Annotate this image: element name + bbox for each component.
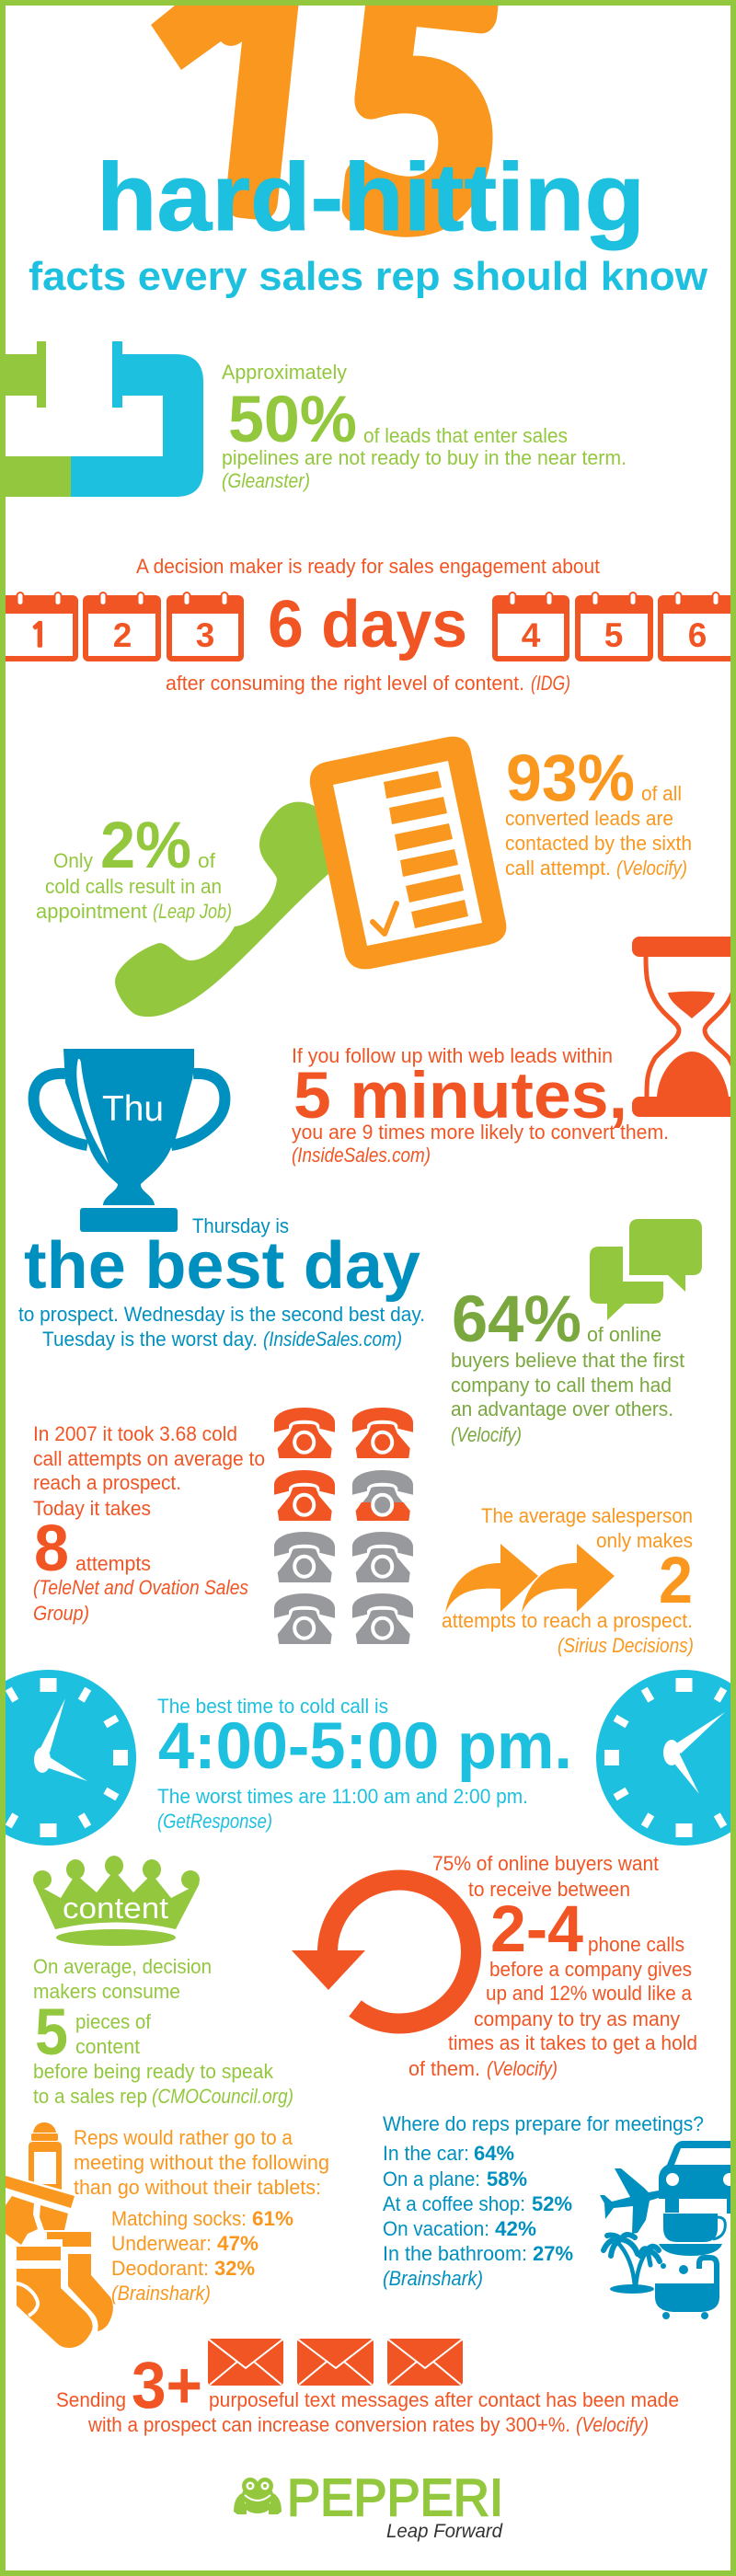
fact: where reps prepare: In the car: (383, 2142, 469, 2165)
calendars: days 1 to 3: 2 (113, 616, 132, 654)
title: facts every sales rep should know (29, 254, 708, 299)
fact: best time to cold call: 4:00-5:00 pm. (158, 1710, 572, 1783)
fact: 5 pieces of content: pieces of (75, 2010, 152, 2033)
fact: 2% of cold calls (36, 810, 232, 923)
trophy label: Thu (102, 1089, 164, 1129)
fact: 2 attempts text: only makes (596, 1529, 693, 1552)
fact: 64% of online buyers: of online (587, 1323, 661, 1346)
fact: where reps prepare: 52% (532, 2192, 572, 2215)
fact: best time to cold call: The worst times are 11:00 am and 2:00 pm. (157, 1785, 528, 1808)
fact: 5 minutes: (InsideSales.com) (292, 1144, 431, 1167)
fact: reps would rather: 61% (252, 2207, 293, 2230)
fact: 8 attempts: (TeleNet and Ovation Sales (33, 1576, 248, 1599)
fact: 2-4 phone calls: (Velocify) (487, 2057, 558, 2080)
fact: reps would rather: than go without their tablets: (74, 2176, 321, 2199)
icon: right clock (596, 1670, 736, 1846)
fact: 8 attempts: 8 (34, 1512, 69, 1585)
fact: 3+ text messages (56, 2350, 679, 2436)
icon: trophy (34, 1049, 224, 1232)
fact: reps would rather: Matching socks: (111, 2207, 247, 2230)
fact: 2 attempts text (442, 1504, 694, 1657)
fact: 93% of converted leads: converted leads are (505, 807, 673, 830)
fact: 64% of online buyers: buyers believe that the first (451, 1349, 685, 1372)
fact: the best day: to prospect. Wednesday is the second best day. (18, 1303, 425, 1326)
fact: 8 attempts: call attempts on average to (33, 1447, 265, 1470)
fact: 2% of cold calls: 2% (100, 810, 191, 882)
fact: the best day: the best day (24, 1229, 420, 1303)
fact: 2-4 phone calls: to receive between (468, 1878, 630, 1901)
calendars: days 1 to 3: 1 (29, 620, 49, 652)
fact: 50% of leads: of leads that enter sales (363, 424, 568, 447)
logo: Pepperi wordmark: Leap Forward (386, 2521, 503, 2542)
fact: the best day (18, 1214, 425, 1351)
fact: 2-4 phone calls (408, 1852, 697, 2080)
fact: 2% of cold calls: of (198, 849, 216, 872)
fact: 2 attempts text: The average salesperson (481, 1504, 693, 1527)
fact: 50% of leads: 50% (228, 384, 357, 456)
logo: Pepperi wordmark: PEPPERI (287, 2468, 503, 2527)
title: hard-hitting (97, 144, 645, 251)
fact: 2-4 phone calls: times as it takes to get a hold (448, 2031, 697, 2054)
fact: 93% of converted leads: call attempt. (505, 857, 611, 880)
fact: 2-4 phone calls: phone calls (588, 1933, 684, 1956)
icon: green telephone handset (115, 802, 328, 1017)
fact: decision maker intro: A decision maker is ready for sales engagement about (136, 555, 601, 578)
fact: 5 pieces of content: before being ready to speak (33, 2060, 274, 2083)
fact: reps would rather: 47% (217, 2232, 259, 2255)
fact: 5 minutes: 5 minutes, (293, 1060, 627, 1133)
fact: where reps prepare: On vacation: (383, 2217, 489, 2240)
fact: 50% of leads (222, 361, 627, 492)
calendars: days 1 to 3 (0, 592, 244, 661)
fact: 2% of cold calls: Only (53, 849, 94, 872)
fact: 50% of leads: (Gleanster) (222, 469, 310, 492)
fact: 3+ text messages: with a prospect can increase conversion rates by 300+%. (87, 2413, 570, 2436)
fact: best time to cold call: The best time to cold call is (157, 1695, 388, 1718)
fact: 3+ text messages: (Velocify) (576, 2413, 649, 2436)
calendars: days 4 to 6: 4 (522, 616, 541, 654)
fact: 5 pieces of content (33, 1955, 293, 2108)
fact: 5 pieces of content: to a sales rep (33, 2085, 147, 2108)
fact: reps would rather: (Brainshark) (111, 2282, 211, 2305)
fact: where reps prepare: At a coffee shop: (383, 2192, 525, 2215)
fact: 2-4 phone calls: of them. (408, 2057, 480, 2080)
icon: orange clipboard checklist (310, 737, 506, 969)
fact: 2-4 phone calls: 2-4 (490, 1893, 583, 1966)
icon: sales pipeline (6, 341, 203, 497)
fact: the best day: Tuesday is the worst day. (42, 1328, 258, 1351)
fact: 64% of online buyers (451, 1283, 685, 1446)
icon: circular return arrow (292, 1880, 471, 2024)
fact: 2-4 phone calls: up and 12% would like a (486, 1982, 692, 2005)
fact: reps would rather: Reps would rather go to a (74, 2126, 293, 2149)
fact: after consuming content: after consuming the right level of content. (166, 672, 524, 695)
fact: the best day: Thursday is (192, 1214, 289, 1237)
fact: where reps prepare: 27% (533, 2242, 573, 2265)
fact: 64% of online buyers: company to call them had (451, 1374, 672, 1397)
calendars: days 1 to 3: 3 (196, 616, 214, 654)
fact: where reps prepare: 42% (495, 2217, 536, 2240)
fact: where reps prepare: Where do reps prepare for meetings? (383, 2112, 704, 2135)
fact: 93% of converted leads: (Velocify) (616, 857, 687, 880)
fact: 5 pieces of content: makers consume (33, 1980, 180, 2003)
fact: 3+ text messages: Sending (56, 2388, 126, 2411)
fact: 64% of online buyers: 64% (452, 1283, 581, 1356)
icon: three envelopes (208, 2339, 463, 2386)
icon: left clock (0, 1670, 136, 1846)
icon: content crown (33, 1856, 200, 1946)
logo: Pepperi frog (234, 2478, 282, 2514)
fact: 5 pieces of content: On average, decision (33, 1955, 212, 1978)
crown label: content (63, 1892, 168, 1925)
fact: 93% of converted leads: contacted by the sixth (505, 832, 692, 855)
fact: after consuming content: (IDG) (531, 672, 570, 695)
headline: 6 days: 6 days (268, 588, 467, 661)
fact: 50% of leads: Approximately (222, 361, 348, 384)
fact: 2% of cold calls: (Leap Job) (153, 900, 232, 923)
fact: reps would rather: meeting without the following (74, 2151, 329, 2174)
fact: 2 attempts text: 2 (659, 1545, 693, 1617)
fact: 93% of converted leads: 93% (506, 742, 635, 815)
fact: 64% of online buyers: (Velocify) (451, 1423, 522, 1446)
fact: 8 attempts: attempts (75, 1552, 151, 1575)
fact: reps would rather: Underwear: (111, 2232, 212, 2255)
fact: 50% of leads: pipelines are not ready to buy in the near term. (222, 446, 627, 469)
fact: 3+ text messages: 3+ (132, 2350, 202, 2422)
fact: 2 attempts text: (Sirius Decisions) (558, 1634, 694, 1657)
icon: car, plane, coffee, palm trees and bath (600, 2141, 736, 2319)
icon: hourglass (632, 937, 736, 1117)
fact: 5 minutes: you are 9 times more likely to convert them. (292, 1121, 669, 1144)
fact: 3+ text messages: purposeful text messages after contact has been made (209, 2388, 679, 2411)
fact: 5 pieces of content: content (75, 2035, 141, 2058)
icon: two orange arrows (445, 1544, 615, 1613)
fact: the best day: (InsideSales.com) (263, 1328, 402, 1351)
fact: 5 minutes (292, 1044, 669, 1167)
fact: 8 attempts: Group) (33, 1602, 89, 1625)
fact: 2-4 phone calls: before a company gives (489, 1958, 692, 1981)
fact: 2-4 phone calls: company to try as many (474, 2007, 681, 2030)
fact: best time to cold call: (GetResponse) (157, 1810, 272, 1833)
fact: where reps prepare: In the bathroom: (383, 2242, 527, 2265)
icon: deodorant, underwear and socks (6, 2122, 113, 2348)
fact: 5 pieces of content: (CMOCouncil.org) (152, 2085, 293, 2108)
fact: 8 attempts (33, 1422, 265, 1625)
fact: 2-4 phone calls: 75% of online buyers want (432, 1852, 660, 1875)
fact: 64% of online buyers: an advantage over others. (451, 1397, 673, 1420)
fact: 8 attempts: In 2007 it took 3.68 cold (33, 1422, 237, 1445)
fact: 93% of converted leads (505, 742, 692, 880)
fact: reps would rather: Deodorant: (111, 2257, 209, 2280)
fact: 2 attempts text: attempts to reach a prospect. (442, 1609, 693, 1632)
fact: reps would rather: 32% (214, 2257, 255, 2280)
icon grid: telephones (274, 1408, 413, 1644)
fact: 2% of cold calls: cold calls result in an (45, 875, 222, 898)
calendars: days 4 to 6: 5 (604, 616, 623, 654)
fact: 93% of converted leads: of all (641, 782, 682, 805)
fact: best time to cold call (157, 1695, 572, 1833)
fact: 8 attempts: reach a prospect. (33, 1471, 181, 1494)
fact: where reps prepare: On a plane: (383, 2168, 480, 2191)
calendars: days 4 to 6: 6 (688, 616, 707, 654)
calendars: days 4 to 6 (492, 592, 736, 661)
fact: 2% of cold calls: appointment (36, 900, 148, 923)
fact: where reps prepare: (Brainshark) (383, 2267, 483, 2290)
icon: speech bubbles (590, 1219, 702, 1320)
fact: reps would rather (74, 2126, 329, 2305)
fact: where reps prepare: 58% (487, 2168, 527, 2191)
title (29, 144, 708, 299)
fact: where reps prepare (383, 2112, 704, 2290)
fact: 5 pieces of content: 5 (35, 1996, 68, 2069)
fact: where reps prepare: 64% (474, 2142, 514, 2165)
fact: 8 attempts: Today it takes (33, 1497, 151, 1520)
fact: 5 minutes: If you follow up with web leads within (292, 1044, 613, 1067)
